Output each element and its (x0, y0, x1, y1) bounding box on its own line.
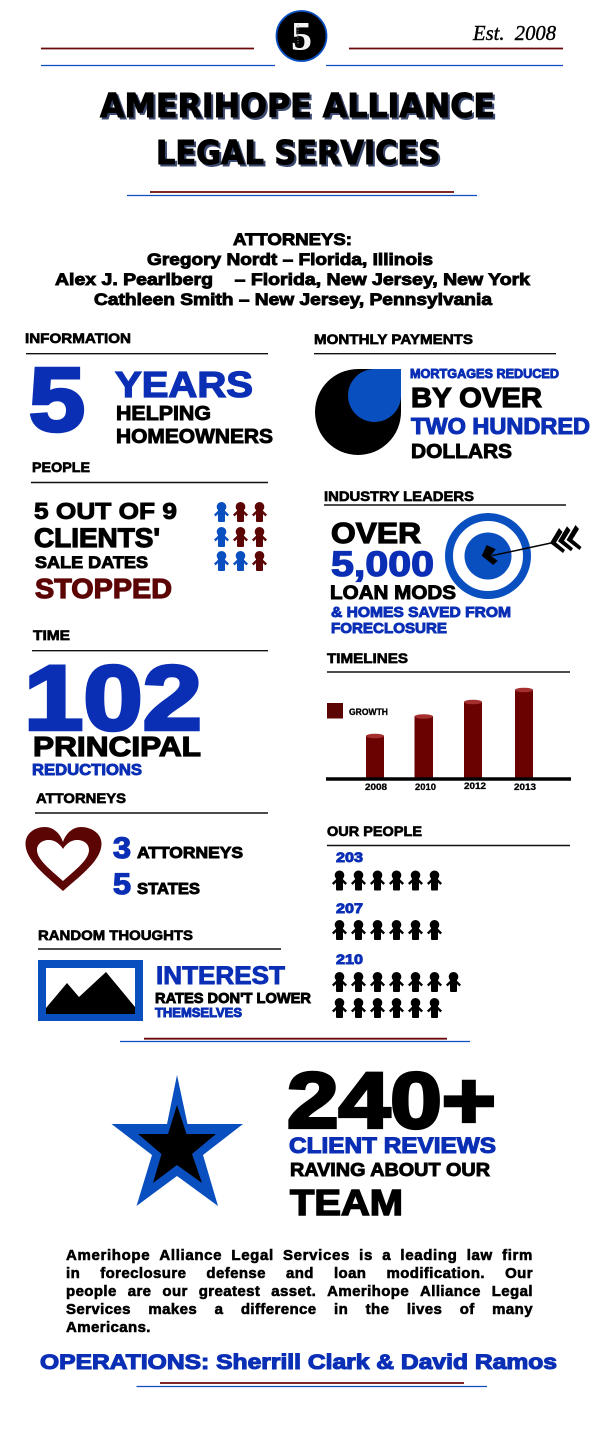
loan mods text: & HOMES SAVED FROM (331, 605, 511, 621)
established date: Est. 2008 (472, 21, 556, 45)
icon: drop chart (315, 369, 401, 455)
description paragraph: people (66, 1283, 117, 1300)
description paragraph: leading (400, 1247, 457, 1264)
heading: monthly payments: MONTHLY PAYMENTS (314, 331, 473, 347)
group 203 (333, 849, 441, 890)
principal reductions text: PRINCIPAL (33, 731, 201, 762)
description paragraph: in (334, 1301, 348, 1318)
heading: random thoughts: RANDOM THOUGHTS (38, 927, 193, 943)
title (100, 86, 495, 172)
description paragraph: the (366, 1301, 389, 1318)
description paragraph: difference (241, 1301, 317, 1318)
description paragraph (66, 1247, 533, 1336)
mortgages text: BY OVER (411, 382, 542, 413)
states count: STATES (137, 881, 200, 898)
people text: 5 OUT OF 9 (34, 498, 177, 524)
icon: people pictogram 5 of 9 (215, 502, 266, 571)
years text (115, 364, 273, 448)
client reviews stat: 240+ (287, 1056, 496, 1144)
interest text: INTEREST (156, 962, 285, 990)
description paragraph: Legal (231, 1247, 274, 1264)
big number 102: 102 (24, 648, 202, 750)
attorneys list: Cathleen Smith – New Jersey, Pennsylvania (94, 290, 493, 309)
interest text (155, 962, 311, 1020)
panel: random thoughts (38, 927, 311, 1021)
description paragraph: in (66, 1265, 80, 1282)
description paragraph: Our (505, 1265, 533, 1282)
attorneys list: Alex J. Pearlberg – Florida, New Jersey, New York (55, 270, 531, 289)
heading: attorneys: ATTORNEYS (36, 790, 126, 806)
attorneys count: ATTORNEYS (137, 845, 243, 862)
heading: industry leaders: INDUSTRY LEADERS (324, 488, 474, 504)
people text: CLIENTS' (34, 523, 160, 553)
states count (113, 868, 200, 901)
years text: HELPING (116, 403, 211, 425)
description paragraph: asset. (271, 1283, 316, 1300)
loan mods text: OVER (331, 518, 421, 550)
operations line: OPERATIONS: Sherrill Clark & David Ramos (40, 1351, 557, 1374)
description paragraph: modification. (386, 1265, 485, 1282)
heading: time: TIME (33, 627, 70, 643)
attorneys count: 3 (113, 832, 131, 865)
mortgages text: TWO HUNDRED (411, 413, 590, 439)
interest text: THEMSELVES (155, 1006, 242, 1020)
description paragraph: of (460, 1301, 475, 1318)
description paragraph: greatest (199, 1283, 260, 1300)
people text (34, 498, 177, 604)
bar chart: 2008 (365, 782, 387, 793)
years text: YEARS (115, 364, 253, 405)
header (41, 11, 563, 66)
client reviews stat (287, 1056, 496, 1223)
attorneys list: Gregory Nordt – Florida, Illinois (147, 250, 433, 269)
description paragraph: firm (502, 1247, 533, 1264)
group 203: 203 (336, 849, 363, 865)
description paragraph: law (467, 1247, 493, 1264)
description paragraph: lives (407, 1301, 442, 1318)
description paragraph: Alliance (420, 1283, 481, 1300)
group 210 (333, 951, 460, 1018)
description paragraph: Amerihope (327, 1283, 409, 1300)
icon: target with arrow (449, 517, 582, 595)
years text: HOMEOWNERS (116, 426, 273, 448)
principal reductions text: REDUCTIONS (32, 762, 142, 779)
bar chart: 2010 (415, 782, 436, 793)
description paragraph: Legal (492, 1283, 533, 1300)
title: AMERIHOPE ALLIANCE (100, 86, 495, 125)
attorneys list (55, 230, 531, 309)
description paragraph: Alliance (159, 1247, 222, 1264)
loan mods text: 5,000 (331, 545, 434, 584)
icon: heart (25, 827, 102, 891)
panel: our people (327, 823, 570, 1018)
interest text: RATES DON'T LOWER (155, 990, 311, 1007)
description paragraph: foreclosure (100, 1265, 186, 1282)
title: LEGAL SERVICES (156, 133, 440, 172)
loan mods text: LOAN MODS (330, 583, 456, 604)
panel: time (24, 627, 268, 779)
states count: 5 (113, 868, 131, 901)
client reviews stat: RAVING ABOUT OUR (290, 1160, 490, 1180)
logo badge: 5 (291, 14, 312, 58)
people text: STOPPED (35, 573, 172, 604)
group 207 (333, 900, 441, 940)
description paragraph: Services (283, 1247, 350, 1264)
people text: SALE DATES (35, 553, 148, 572)
description paragraph: a (215, 1301, 223, 1318)
bar chart (326, 688, 571, 793)
group 210: 210 (336, 951, 363, 967)
mortgages text: DOLLARS (411, 441, 512, 463)
big number 5: 5 (29, 350, 85, 450)
client reviews stat: CLIENT REVIEWS (289, 1133, 496, 1158)
panel: industry leaders (324, 488, 582, 637)
heading: information: INFORMATION (25, 330, 131, 346)
client reviews stat: TEAM (290, 1182, 403, 1223)
panel: information (25, 330, 273, 450)
description paragraph: and (286, 1265, 314, 1282)
description paragraph: defense (206, 1265, 266, 1282)
heading: our people: OUR PEOPLE (327, 823, 422, 839)
description paragraph: Services (66, 1301, 131, 1318)
icon: picture frame with mountains (38, 960, 143, 1021)
description paragraph: are (128, 1283, 151, 1300)
mortgages text (410, 367, 590, 463)
description paragraph: Amerihope (66, 1247, 150, 1264)
description paragraph: is (359, 1247, 373, 1264)
attorneys list: ATTORNEYS: (233, 230, 352, 249)
description paragraph: makes (148, 1301, 197, 1318)
description paragraph: our (162, 1283, 188, 1300)
bar chart: 2012 (464, 781, 486, 792)
group 207: 207 (336, 900, 363, 916)
description paragraph: many (492, 1301, 533, 1318)
heading: people: PEOPLE (32, 459, 90, 475)
loan mods text (330, 518, 511, 637)
description paragraph: a (382, 1247, 391, 1264)
heading: timelines: TIMELINES (327, 650, 408, 666)
loan mods text: FORECLOSURE (331, 621, 447, 637)
bar chart: 2013 (514, 782, 536, 793)
panel: timelines (326, 650, 571, 793)
legend (327, 703, 388, 718)
mortgages text: MORTGAGES REDUCED (410, 367, 559, 381)
panel: attorneys (25, 790, 268, 901)
attorneys count (113, 832, 243, 865)
icon: star (112, 1075, 243, 1206)
description paragraph: loan (334, 1265, 366, 1282)
legend: GROWTH (349, 707, 388, 717)
principal reductions text (32, 731, 201, 779)
panel: people (31, 459, 268, 604)
description paragraph: Americans. (66, 1319, 151, 1336)
logo badge (276, 11, 326, 61)
panel: monthly payments (314, 331, 590, 463)
